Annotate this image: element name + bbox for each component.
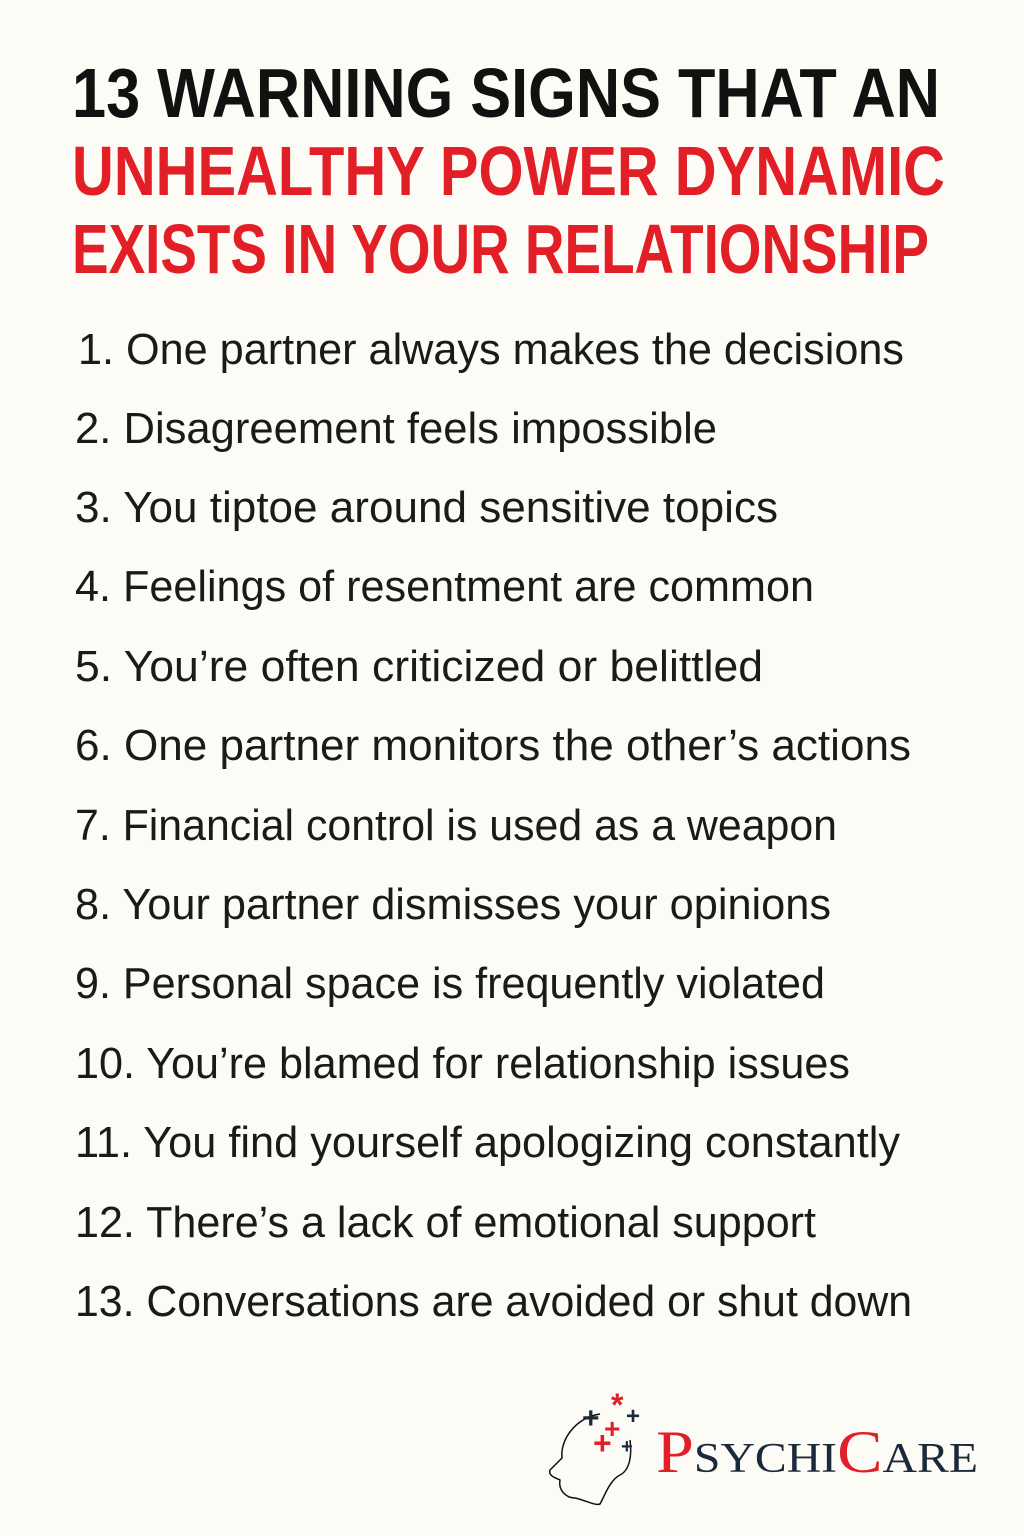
list of warning signs: 1. One partner always makes the decisions xyxy=(78,325,904,374)
list of warning signs: 9. Personal space is frequently violated xyxy=(75,959,825,1008)
list of warning signs: 10. You’re blamed for relationship issues xyxy=(75,1039,850,1088)
list of warning signs: 5. You’re often criticized or belittled xyxy=(75,642,763,691)
icon: head outline with symbols: + xyxy=(626,1403,640,1430)
icon: head outline with symbols: + xyxy=(593,1425,612,1461)
title xyxy=(72,54,945,288)
list of warning signs: 6. One partner monitors the other’s actions xyxy=(75,721,911,770)
icon: head outline with symbols: * xyxy=(611,1387,624,1423)
list of warning signs: 7. Financial control is used as a weapon xyxy=(75,801,837,850)
list of warning signs xyxy=(75,325,912,1326)
list of warning signs: 8. Your partner dismisses your opinions xyxy=(75,880,831,929)
list of warning signs: 2. Disagreement feels impossible xyxy=(75,404,717,453)
list of warning signs: 11. You find yourself apologizing constantly xyxy=(75,1118,900,1167)
icon: head outline with symbols: + xyxy=(604,1413,620,1444)
icon: head outline with symbols: + xyxy=(582,1402,600,1435)
list of warning signs: 13. Conversations are avoided or shut down xyxy=(75,1277,912,1326)
icon: head outline with symbols xyxy=(550,1387,640,1504)
list of warning signs: 3. You tiptoe around sensitive topics xyxy=(75,483,778,532)
list of warning signs: 4. Feelings of resentment are common xyxy=(75,562,814,611)
logo: PsychiCare xyxy=(550,1387,978,1504)
icon: head outline with symbols: + xyxy=(621,1436,633,1458)
brand name: PSYCHI CARE xyxy=(656,1419,978,1485)
list of warning signs: 12. There’s a lack of emotional support xyxy=(75,1198,816,1247)
